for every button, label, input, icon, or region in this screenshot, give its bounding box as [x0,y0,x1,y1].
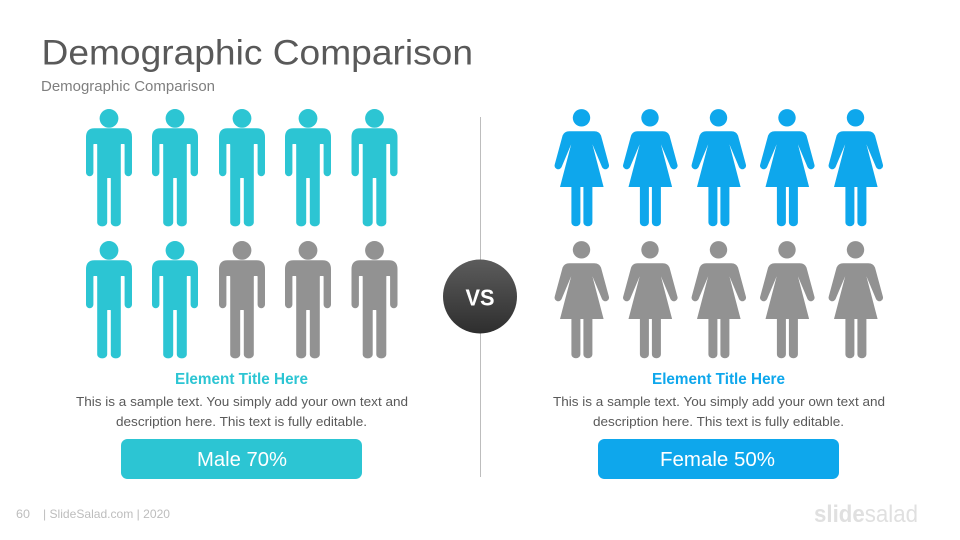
male description: This is a sample text. You simply add your own text and [76,394,408,409]
female element title: Element Title Here [652,371,785,388]
footer text: | SlideSalad.com | 2020 [43,507,170,521]
female stat button: Female 50% [660,449,775,471]
male element title: Element Title Here [175,371,308,388]
vs badge: VS [466,284,494,310]
subtitle: Demographic Comparison [41,79,215,95]
panel: male [76,109,408,479]
female description: description here. This text is fully editable. [593,414,844,429]
panel: female [553,109,885,479]
female stat button [598,439,839,479]
vs badge [443,260,517,334]
male pictogram: 7 of 10 coloured [86,109,398,358]
page number: 60 [16,507,30,521]
icon: male figures coloured [86,109,398,358]
icon: male figures grey [219,241,398,358]
icon: female figures grey [555,241,883,358]
logo: slidesalad: slidesalad [814,501,918,528]
female pictogram: 5 of 10 coloured [555,109,883,358]
female description [553,394,885,429]
title: Demographic Comparison [42,32,473,72]
male description: description here. This text is fully editable. [116,414,367,429]
icon: female figures coloured [555,109,883,226]
male stat button: Male 70% [197,449,287,471]
male description [76,394,408,429]
female description: This is a sample text. You simply add your own text and [553,394,885,409]
male stat button [121,439,362,479]
